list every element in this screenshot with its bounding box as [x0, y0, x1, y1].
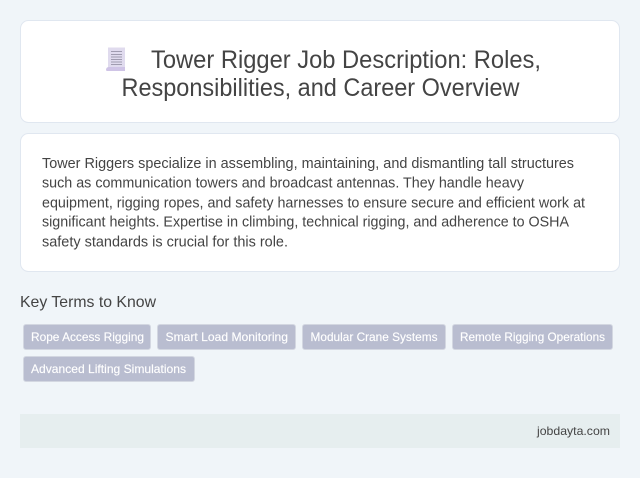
panel: description card: [20, 134, 620, 272]
heading: key terms: Key Terms to Know: [20, 294, 156, 311]
chips: key terms: [24, 324, 612, 382]
chip: remote rigging operations: Remote Rigging Operations: [460, 330, 605, 344]
description text: equipment, rigging ropes, and safety harnesses to ensure secure and efficient work at: [42, 196, 585, 212]
icon: document scroll: [106, 48, 125, 71]
chip: smart load monitoring: Smart Load Monitoring: [166, 330, 288, 344]
chip: modular crane systems: Modular Crane Systems: [310, 330, 438, 344]
chip: smart load monitoring: [158, 324, 296, 350]
footer bar: [20, 414, 620, 448]
description text: [42, 156, 585, 250]
chip: rope access rigging: Rope Access Rigging: [31, 330, 144, 344]
chip: advanced lifting simulations: Advanced Lifting Simulations: [31, 362, 186, 376]
description text: such as communication towers and broadcast antennas. They handle heavy: [42, 176, 525, 192]
chip: advanced lifting simulations: [24, 356, 194, 382]
description text: safety standards is crucial for this role.: [42, 234, 288, 250]
chip: remote rigging operations: [452, 324, 612, 350]
chip: modular crane systems: [302, 324, 446, 350]
panel: title card: [20, 20, 620, 122]
title: Tower Rigger Job Description: Roles,: [151, 46, 541, 74]
title: Responsibilities, and Career Overview: [122, 74, 520, 102]
description text: Tower Riggers specialize in assembling, maintaining, and dismantling tall structures: [42, 156, 574, 172]
description text: significant heights. Expertise in climbing, technical rigging, and adherence to OSHA: [42, 214, 569, 230]
chip: rope access rigging: [24, 324, 150, 350]
footer bar: jobdayta.com: [536, 424, 610, 438]
title: [122, 46, 541, 102]
